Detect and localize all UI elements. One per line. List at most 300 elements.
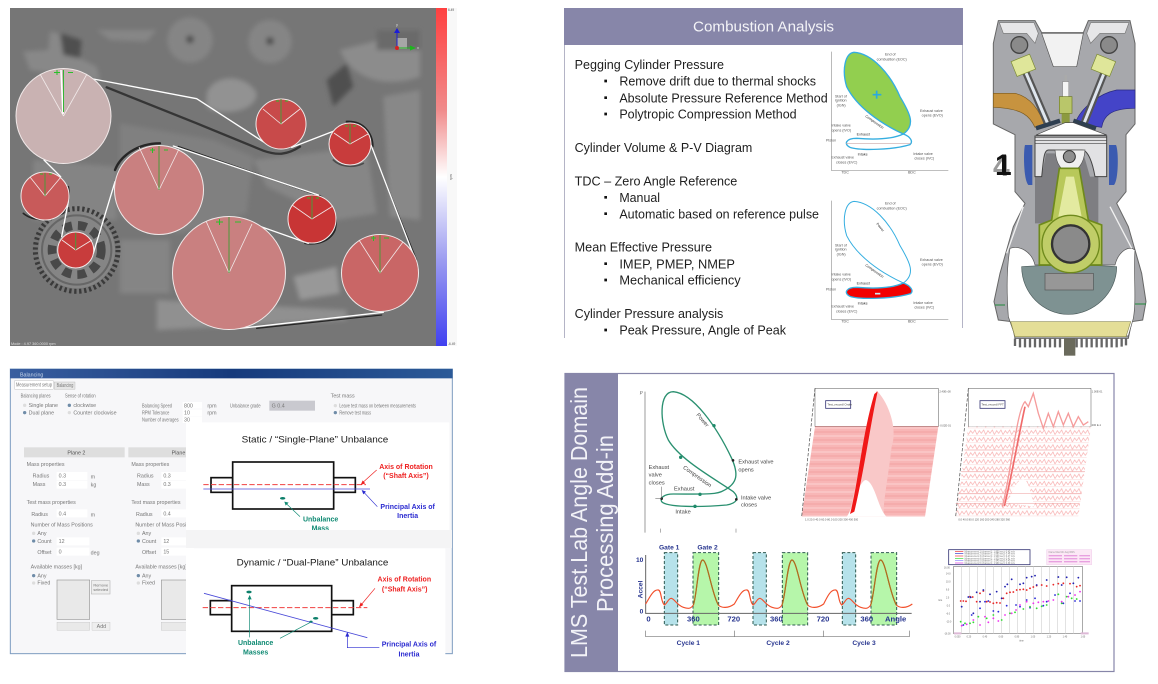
waterfall plot: order map: 2.40E+00 [939, 390, 951, 394]
plane 1 column: Test mass properties [131, 500, 181, 506]
cooling fins [1015, 339, 1126, 347]
P-V diagram: pumping work area: Power [875, 222, 885, 233]
connecting rod [1039, 168, 1102, 265]
pulley 6 [329, 123, 371, 165]
P-V diagram: pumping work area: ignition [835, 248, 847, 252]
y axis ticks: 2.0 [946, 597, 950, 599]
panel: combustion analysis [564, 8, 963, 338]
analysis text list: Mean Effective Pressure [575, 241, 712, 255]
analysis text list: Remove drift due to thermal shocks [619, 75, 816, 89]
plane 1 column: Available masses [kg] [135, 565, 187, 571]
waterfall plot: spectrum map: Test_recordl FFT [981, 403, 1004, 407]
analysis text list: IMEP, PMEP, NMEP [619, 257, 735, 271]
dynamic labels: (“Shaft Axis”) [382, 586, 427, 593]
setup row: Test mass [331, 394, 355, 400]
stroke number: 4 [993, 150, 1010, 183]
pulley 9 [58, 232, 94, 268]
green P-V diagram: Intake [675, 509, 691, 515]
cam rockers [1011, 37, 1117, 53]
colour scale bar: rpm [449, 174, 453, 180]
green gasket marks [995, 302, 1146, 306]
x axis ticks: 0.80 [1015, 637, 1020, 639]
P-V diagram: pumping work area: Intake [858, 301, 868, 305]
waterfall plot: order map: Test_recordl Order [827, 403, 852, 407]
rod web [1058, 177, 1082, 217]
sump plug [1064, 338, 1075, 356]
plane 1 column: 0.4 [163, 511, 171, 517]
P-V diagram: positive work area: End of [885, 53, 897, 57]
chart labels: 720 [817, 615, 829, 624]
plane 1 column [128, 447, 229, 630]
P-V diagram: pumping work area: Exhaust [857, 281, 870, 285]
waterfall plot: order map [802, 388, 952, 522]
wrist pin [1055, 150, 1085, 172]
cycle brackets [646, 631, 909, 637]
dynamic labels [238, 577, 437, 658]
analysis text list: Cylinder Pressure analysis [575, 307, 723, 321]
scatter plot [938, 550, 1092, 643]
tabs [15, 381, 75, 389]
crank bearing [1042, 215, 1099, 273]
setup row [21, 394, 416, 424]
static rotor [211, 462, 355, 509]
acceleration curve [646, 560, 912, 608]
data series [961, 576, 1080, 626]
plane 2 column: Available masses [kg] [31, 565, 83, 571]
plane 1 column: Plane 1 [172, 450, 190, 456]
x axis ticks: 1.60 [1081, 637, 1086, 639]
header bar [564, 8, 963, 45]
engine background [10, 8, 436, 346]
analysis text list: Absolute Pressure Reference Method [619, 91, 828, 105]
chart labels: Cycle 1 [677, 640, 700, 647]
valve springs [1011, 54, 1116, 76]
plane 1 column: 12 [163, 539, 169, 545]
x axis ticks: 1.20 [1047, 637, 1052, 639]
green P-V diagram: opens [738, 467, 754, 473]
analysis text list [575, 58, 828, 338]
plane 2 column: Count [37, 539, 52, 545]
plane 2 column: 0 [59, 550, 62, 556]
plane 1 column: Mass properties [131, 462, 170, 468]
P-V diagram: pumping work area: closes (IVC) [914, 306, 934, 310]
setup row: Dual plane [29, 410, 54, 416]
panel frame [564, 45, 962, 338]
P-V diagram: positive work area: ignition [835, 99, 847, 103]
P-V diagram: positive work area: (IGN) [837, 103, 846, 107]
side band title: Processing Add-in [592, 435, 618, 612]
belt line [44, 79, 417, 328]
engine casting shading [23, 17, 420, 330]
y axis ticks: -16.00 [944, 633, 951, 635]
axis triad [394, 22, 419, 50]
dynamic labels: Unbalance [238, 640, 273, 647]
gated acceleration chart [636, 544, 912, 647]
P-V diagram: positive work area: BDC [908, 170, 916, 174]
legend [949, 550, 1030, 565]
legend: Measurement 1 (channel 1: 1.850 sec): 0.45 m/s [965, 550, 1016, 553]
green P-V diagram: p [639, 389, 643, 394]
funnel [1042, 33, 1083, 67]
setup row: Leave test mass on between measurements [339, 403, 416, 409]
plane 1 column: Radius [136, 512, 153, 518]
green P-V diagram: Exhaust [674, 486, 695, 492]
P-V diagram: positive work area: closes (EVC) [836, 161, 857, 165]
P-V diagram: positive work area: Piston [826, 139, 836, 143]
P-V diagram: pumping work area: combustion (EOC) [877, 206, 907, 210]
setup row: Number of averages [142, 418, 179, 424]
pulley 1 [16, 68, 111, 164]
x axis ticks: 0.000 [955, 637, 961, 639]
P-V diagram: positive work area: Intake [858, 152, 868, 156]
valves [1023, 67, 1107, 128]
waterfall plot: spectrum map: 1.00E-01 [1092, 390, 1103, 394]
window title: Balancing [20, 372, 43, 378]
colour scale bar: -6.49 [448, 342, 455, 346]
P-V diagram: positive work area: TDC [841, 170, 849, 174]
plane 2 column: Remove [93, 582, 109, 587]
P-V diagram: pumping work area: Start of [835, 243, 848, 247]
chart labels: 0 [646, 615, 651, 624]
pulley 5 [256, 99, 306, 149]
chart labels: 360 [860, 615, 873, 624]
panel: balancing software window [10, 369, 453, 654]
legend: Measurement 4 (channel 1: 1.920 sec): 0.41 m/s [965, 557, 1016, 560]
P-V diagram: pumping work area: (IGN) [837, 252, 846, 256]
P-V diagram: positive work area: combustion (EOC) [877, 57, 907, 61]
P-V diagram: pumping work area: opens (IVO) [831, 278, 851, 282]
grid [961, 567, 1073, 633]
plane 2 column: Fixed [37, 581, 50, 587]
coolant jacket right [1109, 145, 1118, 185]
chart labels: 720 [727, 615, 740, 624]
P-V diagram: positive work area: Intake valve [913, 152, 933, 156]
plane 1 column: Count [142, 539, 157, 545]
green P-V diagram [639, 389, 774, 533]
plane 1 column: Any [142, 573, 152, 579]
chart labels: Gate 1 [659, 544, 680, 551]
plane 1 column: Radius [137, 473, 154, 479]
static heading: Static / “Single-Plane” Unbalance [242, 435, 388, 445]
setup row: Unbalance grade [230, 404, 261, 410]
intake port [993, 93, 1045, 127]
plane 2 column: m [91, 513, 96, 519]
legend: Measurement 6 (channel 1: 1.960 sec): 0.39 m/s [965, 562, 1016, 565]
diagram: static single-plane unbalance [186, 422, 449, 533]
axis triad: y [396, 22, 398, 27]
plane 2 column: m [91, 474, 96, 480]
y axis ticks: -6.0 [946, 613, 951, 615]
plane 2 column: 12 [59, 539, 65, 545]
plane 2 column: Plane 2 [67, 450, 85, 456]
side band [565, 373, 618, 672]
chart labels [636, 544, 906, 647]
plane 2 column: Any [37, 573, 47, 579]
pulleys with angular markers [16, 68, 418, 330]
analysis text list: Peak Pressure, Angle of Peak [619, 324, 787, 338]
P-V diagram: positive work area: opens (EVO) [922, 114, 943, 118]
P-V diagram: pumping work area: Piston [826, 288, 836, 292]
shaft axis [203, 483, 366, 486]
plane 2 column: 0.4 [59, 511, 66, 517]
P-V diagram: positive work area: Exhaust [857, 132, 870, 136]
plane 2 column: selected [93, 587, 108, 592]
chart labels: 10 [636, 557, 644, 564]
gate windows [664, 553, 897, 625]
setup row: Remove test mass [339, 410, 371, 416]
x axis ticks: time [1019, 640, 1024, 643]
legend: Measurement 2 (channel 1: 1.880 sec): 0.48 m/s [965, 553, 1016, 556]
inertia axis [203, 488, 370, 490]
pulley 8 [21, 172, 69, 220]
y axis ticks: m/s [938, 598, 943, 602]
x axis ticks: 1.00 [1031, 637, 1036, 639]
static labels: Principal Axis of [380, 504, 436, 511]
plane 2 column: deg [91, 551, 100, 557]
colour scale bar [436, 8, 457, 346]
analysis text list: TDC – Zero Angle Reference [575, 174, 737, 188]
crankcase white cavity [1007, 247, 1135, 336]
analysis text list: Polytropic Compression Method [619, 108, 797, 122]
y axis ticks: 6.0 [946, 589, 950, 591]
analysis text list: Pegging Cylinder Pressure [575, 58, 724, 72]
band between diagrams [186, 530, 452, 548]
setup row: Balancing Speed [142, 404, 172, 410]
analysis text list: Automatic based on reference pulse [619, 207, 819, 221]
legend: Measurement 5 (channel 1: 1.940 sec): 0.40 m/s [965, 560, 1016, 563]
setup row: G 0.4 [272, 403, 285, 409]
plane 2 column: Test mass properties [27, 500, 76, 506]
plane 2 column: Mass properties [27, 462, 65, 468]
stroke number: 1 [995, 149, 1012, 182]
static labels: Mass [312, 526, 329, 533]
chart labels: 360 [770, 615, 783, 624]
analysis text list: Manual [619, 191, 660, 205]
plane 1 column: 15 [163, 550, 169, 556]
combustion chamber [1036, 123, 1107, 135]
P-V diagram: pumping work area: opens (EVO) [922, 263, 943, 267]
spark plug [1059, 75, 1072, 123]
x axis ticks: 1.40 [1063, 637, 1068, 639]
x axis ticks: 0.20 [967, 637, 972, 639]
y axis ticks: 14.0 [946, 573, 951, 575]
static labels: (“Shaft Axis”) [383, 473, 429, 480]
static labels: Axis of Rotation [379, 464, 433, 471]
pulley 3 [172, 216, 286, 330]
setup row: Single plane [29, 403, 58, 409]
x axis ticks: 0.60 [999, 637, 1004, 639]
P-V diagram: positive work area: Start of [835, 94, 848, 98]
chart labels: Cycle 3 [852, 640, 876, 647]
arrows [284, 470, 377, 517]
setup row: rpm [207, 404, 217, 410]
dynamic heading: Dynamic / “Dual-Plane” Unbalance [237, 557, 388, 567]
plane 1 column: Number of Mass Positions [135, 523, 198, 529]
setup row: 10 [184, 410, 190, 416]
dynamic labels: Inertia [399, 651, 420, 658]
green P-V diagram: Intake valve [741, 495, 771, 501]
side band title [566, 387, 618, 658]
analysis text list: Cylinder Volume & P-V Diagram [575, 141, 752, 155]
P-V diagram: positive work area [826, 52, 948, 174]
P-V diagram: pumping work area: BDC [908, 319, 916, 323]
tabs: Balancing [57, 383, 73, 389]
plane 2 column: Radius [31, 512, 48, 518]
green P-V diagram: closes [741, 503, 757, 509]
dynamic inertia axis [204, 593, 367, 638]
setup row: rpm [207, 411, 217, 417]
green P-V diagram: Exhaust [649, 465, 670, 471]
green P-V diagram: valve [649, 473, 662, 479]
plane 2 column: Mass [33, 482, 46, 488]
static diagram backdrop [186, 422, 449, 530]
P-V diagram: pumping work area: Intake valve [831, 273, 851, 277]
P-V diagram: positive work area: Exhaust valve [920, 109, 943, 113]
panel: engine cross-section [993, 21, 1146, 356]
dynamic labels: Masses [243, 649, 268, 656]
plane 2 column: Offset [37, 550, 52, 556]
pulley 7 [288, 195, 336, 243]
pulley 2 [114, 146, 204, 234]
waterfall plot: spectrum map [956, 388, 1103, 522]
chart labels: Accel [638, 580, 645, 598]
plane 1 column: 0.3 [163, 474, 171, 480]
plane 2 column: 0.3 [59, 482, 66, 488]
toothed crank wheel [35, 209, 118, 291]
setup row: Sense of rotation [65, 394, 96, 400]
green P-V diagram: Exhaust valve [738, 460, 774, 466]
setup row: RPM Tolerance [142, 411, 169, 417]
P-V diagram: pumping work area: TDC [841, 319, 849, 323]
waterfall plot: order map: -0.02E-01 [939, 424, 952, 428]
plane 2 column [24, 447, 125, 630]
oil sump [1011, 322, 1131, 337]
axis triad: x [417, 45, 419, 50]
mode label: Mode : 4.97 360.0000 rpm [11, 342, 56, 346]
heading: Combustion Analysis [693, 18, 834, 36]
waterfall plot: order map: 1.0 20.0 40.0 60.0 80.0 100 200 300 400 500 [805, 518, 859, 522]
P-V diagram: positive work area: Exhaust valve [831, 156, 854, 160]
title bar [10, 369, 453, 378]
setup row: Balancing planes [21, 394, 51, 400]
panel border [565, 374, 1114, 672]
diagram: dynamic dual-plane unbalance [186, 548, 445, 658]
P-V diagram: positive work area: opens (IVO) [831, 129, 851, 133]
setup row: 800 [184, 404, 193, 410]
y axis ticks: 16.00 [944, 567, 951, 569]
window frame [10, 369, 452, 654]
y axis ticks: -2.0 [946, 605, 951, 607]
P-V diagram: positive work area: Compression [864, 114, 884, 130]
plane 2 column: Add [97, 624, 106, 630]
dynamic diagram backdrop [186, 548, 445, 656]
panel: belt drive modal analysis [10, 8, 436, 346]
chart labels: 360 [687, 615, 700, 624]
waterfall plot: spectrum map: 0.0 40.0 80.0 120 160 200 240 280 320 360 [958, 518, 1011, 522]
exhaust port [1075, 90, 1135, 127]
plane 1 column: Mass [137, 482, 150, 488]
plot frame [953, 567, 1083, 633]
colour scale bar: 6.49 [448, 8, 454, 12]
chart labels: Angle [885, 615, 906, 624]
piston rings [1035, 138, 1107, 143]
dynamic labels: Axis of Rotation [378, 577, 431, 584]
chart labels: Gate 2 [697, 544, 718, 551]
setup row: clockwise [73, 403, 96, 409]
static labels: Inertia [397, 513, 418, 520]
pulley 4 [342, 234, 418, 312]
piston [1035, 136, 1107, 177]
axes [646, 555, 912, 613]
side band title: LMS Test.Lab Angle Domain [566, 387, 592, 658]
green P-V diagram: closes [649, 480, 665, 486]
crank counterweight [1022, 265, 1117, 314]
y axis ticks: -10.0 [946, 621, 952, 623]
x axis ticks [955, 637, 1086, 643]
plane 2 column: Radius [33, 473, 50, 479]
green P-V diagram: Power [694, 412, 709, 429]
P-V diagram: pumping work area: Compression [864, 263, 884, 279]
P-V diagram: positive work area: closes (IVC) [914, 157, 934, 161]
static labels [303, 464, 436, 533]
green P-V diagram: Compression [682, 465, 712, 489]
plane 1 column: Any [142, 531, 152, 537]
y axis ticks [938, 567, 952, 635]
panel: LMS Test.Lab angle domain add-in [565, 373, 1114, 672]
plane 2 column: Number of Mass Positions [31, 523, 93, 529]
plane 1 column: 0.3 [163, 482, 171, 488]
dynamic arrows [248, 588, 379, 648]
dynamic rotor [210, 586, 353, 631]
plane 2 column: Any [37, 531, 47, 537]
stats legend: Name Max Min Avg RMS [1049, 551, 1075, 554]
legend: Measurement 3 (channel 1: 1.900 sec): 0.47 m/s [965, 555, 1016, 558]
static labels: Unbalance [303, 517, 338, 524]
P-V diagram: pumping work area: closes (EVC) [836, 310, 857, 314]
y axis ticks: 10.0 [946, 581, 951, 583]
P-V diagram: pumping work area: End of [885, 202, 897, 206]
stats legend [1047, 550, 1092, 565]
P-V diagram: pumping work area: Intake valve [913, 301, 933, 305]
belt shadow [23, 87, 417, 328]
rocker covers [999, 23, 1129, 43]
P-V diagram: pumping work area [826, 201, 948, 323]
dynamic shaft axis [203, 606, 367, 609]
setup row: 30 [184, 418, 190, 424]
x axis ticks: 0.40 [983, 637, 988, 639]
analysis text list: Mechanical efficiency [619, 274, 741, 288]
P-V diagram: positive work area: Intake valve [831, 124, 851, 128]
P-V diagram: pumping work area: Exhaust valve [920, 258, 943, 262]
dynamic labels: Principal Axis of [382, 642, 437, 649]
unbalance mass [280, 497, 285, 500]
piston underside [1035, 153, 1098, 223]
plane 2 column: kg [91, 483, 96, 489]
engine block outline [993, 21, 1146, 338]
plane 1 column: Offset [142, 550, 157, 556]
crankcase ribs [1007, 207, 1132, 253]
coolant jackets [1024, 145, 1032, 185]
plane 1 column: Fixed [142, 581, 155, 587]
P-V diagram: pumping work area: Exhaust valve [831, 305, 854, 309]
plane 2 column: 0.3 [59, 474, 66, 480]
end stubs [954, 632, 1089, 634]
chart labels: 0 [640, 608, 644, 615]
chart labels: Cycle 2 [766, 640, 790, 647]
setup row: Counter clockwise [73, 410, 117, 416]
tabs: Measurement setup [16, 383, 52, 389]
unbalance masses [246, 591, 318, 623]
